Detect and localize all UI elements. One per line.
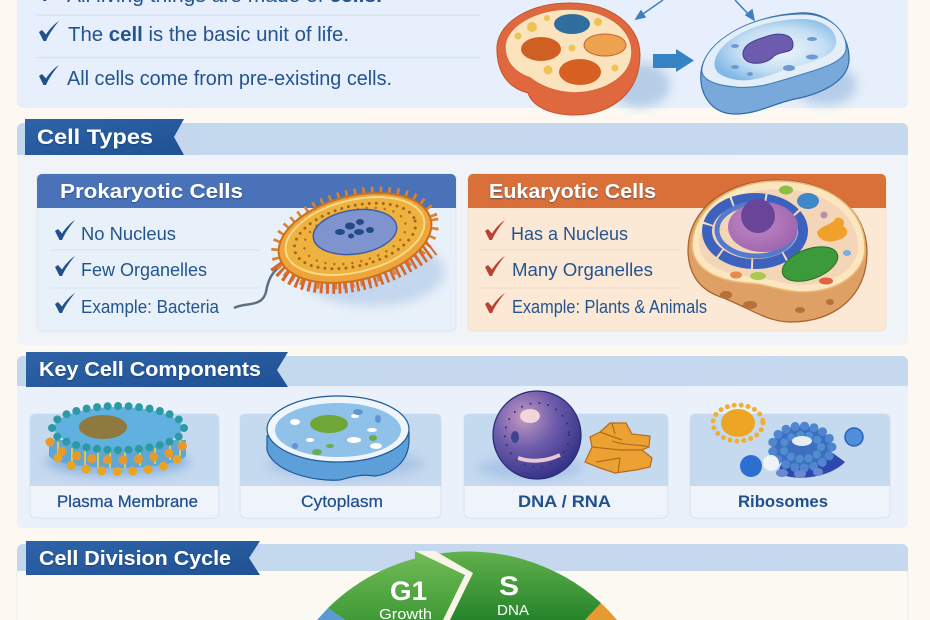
icon: orange chromatin bbox=[585, 423, 652, 473]
icon: cytoplasm disc bbox=[267, 396, 423, 480]
card: cytoplasm: Cytoplasm bbox=[301, 492, 383, 511]
panel: cell types bbox=[17, 119, 908, 345]
list: eukaryotic features: Example: Plants & Animals bbox=[512, 297, 707, 317]
checklist: cell theory statements bbox=[36, 0, 480, 90]
icon: eukaryotic cell bbox=[688, 180, 867, 322]
icon: purple sphere bbox=[478, 391, 582, 479]
list: prokaryotic features: No Nucleus bbox=[81, 224, 176, 244]
heading: key cell components: Key Cell Components bbox=[39, 359, 261, 381]
panel: cell division cycle bbox=[17, 541, 908, 620]
icon: bacterium bbox=[234, 177, 444, 308]
checklist: cell theory statements: The cell is the basic unit of life. bbox=[68, 24, 349, 46]
card: eukaryotic cells bbox=[468, 174, 886, 331]
segment label: S: DNA bbox=[497, 602, 529, 619]
card: plasma membrane bbox=[30, 406, 219, 518]
segment label: G1 bbox=[379, 576, 432, 620]
heading: key cell components bbox=[26, 352, 288, 387]
icon: orange cell bbox=[497, 3, 670, 115]
panel: cell theory bbox=[17, 0, 908, 115]
heading: cell division cycle bbox=[26, 541, 260, 575]
arrow: orange cell to blue cell bbox=[653, 49, 694, 72]
segment label: S bbox=[497, 571, 529, 619]
icon: membrane disc bbox=[46, 406, 190, 476]
card: prokaryotic cells: Prokaryotic Cells bbox=[60, 181, 243, 203]
card: cytoplasm bbox=[240, 396, 441, 518]
heading: cell types bbox=[25, 119, 184, 155]
icon: ribosome clusters bbox=[713, 405, 863, 478]
checklist: cell theory statements: All cells come from pre-existing cells. bbox=[67, 68, 392, 90]
list: eukaryotic features: Has a Nucleus bbox=[511, 224, 628, 244]
segment label: G1: G1 bbox=[390, 576, 427, 606]
list: prokaryotic features: Few Organelles bbox=[81, 260, 207, 280]
segment label: S: S bbox=[499, 571, 519, 601]
heading: cell types: Cell Types bbox=[37, 126, 153, 149]
chart: cell cycle wheel bbox=[317, 551, 617, 620]
arrows: from above to each cell bbox=[636, 0, 754, 20]
panel: key cell components bbox=[17, 352, 908, 528]
card: ribosomes bbox=[690, 405, 890, 518]
card: ribosomes: Ribosomes bbox=[738, 492, 828, 511]
card: prokaryotic cells bbox=[37, 174, 456, 331]
card: plasma membrane: Plasma Membrane bbox=[57, 492, 198, 511]
card: eukaryotic cells: Eukaryotic Cells bbox=[489, 181, 656, 203]
heading: cell division cycle: Cell Division Cycle bbox=[39, 548, 231, 570]
list: prokaryotic features: Example: Bacteria bbox=[81, 297, 220, 317]
icon: blue cell bbox=[701, 13, 857, 114]
list: eukaryotic features: Many Organelles bbox=[512, 260, 653, 280]
list: prokaryotic features bbox=[50, 220, 260, 317]
list: eukaryotic features bbox=[480, 220, 707, 317]
card: DNA / RNA: DNA / RNA bbox=[518, 492, 611, 511]
card: DNA / RNA bbox=[464, 391, 668, 518]
